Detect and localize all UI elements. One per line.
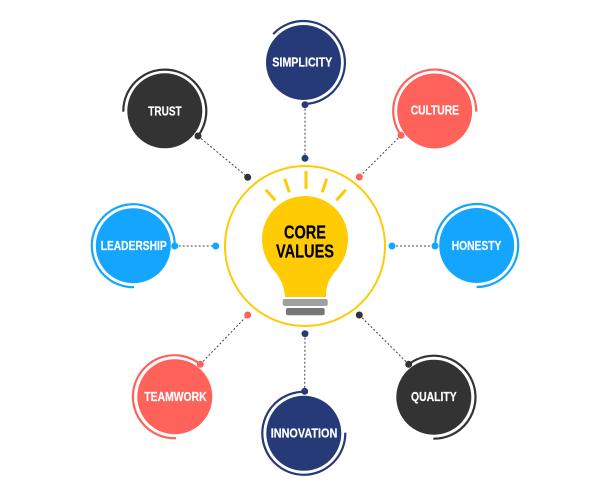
node: simplicity: SIMPLICITY [272, 56, 333, 70]
node: leadership: LEADERSHIP [101, 239, 167, 253]
node: quality: QUALITY [411, 390, 457, 404]
node: culture [356, 70, 476, 180]
title [276, 222, 334, 261]
bulb rays [266, 171, 346, 200]
node: honesty [388, 204, 518, 287]
bulb body [262, 196, 348, 297]
node: teamwork [133, 312, 251, 438]
title: CORE [284, 222, 326, 242]
title: VALUES [276, 241, 334, 261]
node: culture: CULTURE [411, 104, 459, 118]
node: trust: TRUST [148, 104, 182, 118]
node: honesty: HONESTY [452, 239, 502, 253]
node: trust [123, 70, 251, 181]
node: teamwork: TEAMWORK [144, 390, 207, 404]
node: leadership [92, 204, 219, 287]
bulb base bottom [286, 308, 325, 315]
icon: light bulb with title [262, 171, 348, 315]
node: simplicity [266, 21, 345, 162]
node: quality [356, 312, 475, 439]
bulb base top [283, 299, 328, 306]
node: innovation: INNOVATION [271, 426, 337, 440]
node: innovation [262, 330, 345, 475]
central ring [225, 166, 385, 326]
